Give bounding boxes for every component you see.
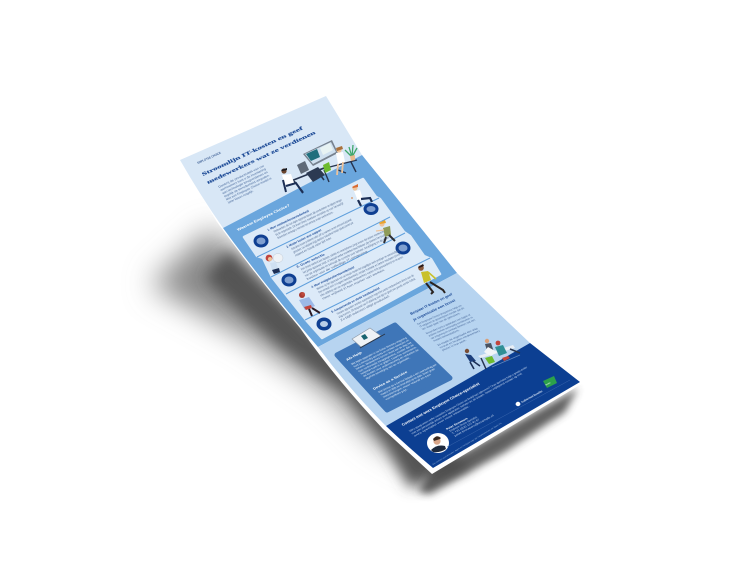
card body one: hun vertrouwde inloggegevens, zonder dat de bbox=[357, 343, 415, 373]
card body one bbox=[350, 336, 423, 380]
reason 3 text: van de organisatie en behoudt de controle over beheer, beveiliging en de totale bbox=[304, 235, 390, 278]
reason 4 text: Dat vertaalt zich in hogere betrokkenheid, minder frustratie en betere resultaten binnen bbox=[317, 252, 402, 294]
reason 5 text: Nieuwe apparaten worden automatisch ingericht zodat medewerkers direct aan de bbox=[336, 273, 415, 316]
logo: green partner: Bechtle bbox=[544, 381, 552, 386]
person right bbox=[336, 147, 342, 153]
card body one: algehele beveiliging van uw organisatie. bbox=[364, 356, 411, 380]
right column heading: Bespaar IT-kosten en geef bbox=[409, 292, 454, 316]
reason 4 text: meer vrijheid in hun manier van werken. bbox=[321, 267, 386, 301]
card body two: investeringen meer vooraf en een bbox=[382, 372, 433, 399]
plant bbox=[345, 145, 357, 157]
card body one: helpdesk hoeft in te grijpen. Daarmee verminderen bbox=[359, 345, 418, 375]
reason 1 text: Bovendien verlaagt u hiermee het verloop onder werknemers. bbox=[276, 210, 334, 240]
panel: why employee choice bbox=[223, 155, 457, 347]
card body two: maand en blijft uw vloot altijd up-to-date. Geen grote bbox=[379, 367, 436, 396]
card body one: Met Apple-apparaten in uw Active Directory-omgeving bbox=[350, 336, 408, 366]
title: Stroomlijn IT-kosten en geef bbox=[201, 125, 305, 177]
right column paragraphs: modern beheerplatform. bbox=[432, 328, 461, 343]
panel: benefits section bbox=[318, 273, 530, 426]
right column paragraphs: vooruit en houden medewerkers bbox=[438, 329, 482, 349]
card heading: device as a service: Device as a Service bbox=[372, 370, 409, 391]
specialist details: Peter Brouwers bbox=[445, 417, 469, 431]
icon: reason 3 bbox=[396, 242, 410, 254]
right column paragraphs: Een Employee Choice-programma helpt om bbox=[416, 304, 463, 326]
footer rule bbox=[447, 380, 570, 447]
intro paragraph: Met een Employee Choice-model is bbox=[225, 176, 273, 201]
heading: why employee choice: Waarom Employee Choice? bbox=[236, 203, 291, 232]
reasons list cards bbox=[244, 179, 440, 338]
paper sheet bbox=[178, 94, 583, 474]
right column paragraphs: Zo maakt de organisatie een stap bbox=[436, 326, 479, 347]
reason 5 text: Zo blijft iedereen altijd productief. bbox=[340, 294, 391, 322]
card body one: beheren. Medewerkers kunnen direct aan de slag met bbox=[355, 341, 413, 371]
logo: green partner bbox=[543, 376, 557, 388]
reason 4 text: 4. Meer eindgebruikerstevredenheid bbox=[310, 265, 355, 289]
intro paragraph: werknemers kunt u de investering bbox=[219, 166, 267, 192]
reason 3 text: het juiste apparaat vindt. U bepaalt welke modellen beschikbaar zijn binnen het budget bbox=[302, 232, 388, 274]
illustration: man with back pain bbox=[299, 292, 320, 316]
contact heading: Contact met onze Employee Choice-specialist bbox=[400, 381, 481, 427]
right column paragraphs bbox=[416, 303, 488, 352]
intro paragraph: tegelijk de tevredenheid vergroten. bbox=[223, 173, 271, 198]
reason 3 text: kosten van de volledige IT-omgeving. bbox=[306, 249, 369, 281]
card body two: Met Device as a Service betaalt u een vast bedrag per bbox=[377, 363, 438, 394]
right column paragraphs: ten koste gaat van de gebruikers. bbox=[420, 311, 462, 331]
icon: reason 4 bbox=[282, 274, 296, 286]
intro paragraph bbox=[217, 163, 275, 205]
icon: apple logo bbox=[516, 402, 520, 406]
contact paragraph: onze specialist voor meer informatie. bbox=[413, 404, 471, 438]
reason 2 text: 2. Minder kosten voor support bbox=[285, 228, 322, 249]
contact paragraph: Wilt u graag weten welke voordelen Employee Choice uw bedrijf kan opleveren? Onze specialist helpt u graag verder bbox=[408, 365, 528, 433]
title: medewerkers wat ze verdienen bbox=[206, 130, 317, 185]
card body one: kunt u eenvoudig accounts en rechten toewijzen en bbox=[352, 338, 411, 368]
reason 1 text bbox=[266, 194, 347, 242]
illustration: woman with speech bubble bbox=[266, 254, 283, 274]
illustration: office desk scene bbox=[281, 140, 357, 193]
icon: reason 5 bbox=[316, 318, 332, 330]
icon: reason 2 bbox=[364, 203, 378, 215]
card heading: help: AD-Help bbox=[345, 350, 363, 362]
reason 2 text: gebruiken. Uw helpdesk krijgt daardoor beduidend minder tickets binnen per bbox=[292, 220, 354, 254]
specialist details: peter.brouwers@example.nl bbox=[453, 414, 495, 437]
reason 4 text: Werken op het apparaat van uw keuze maakt het dagelijkse werk prettiger en eenvoudiger. bbox=[315, 248, 400, 291]
illustration: person running bbox=[351, 184, 372, 206]
right column heading bbox=[409, 292, 457, 322]
right column paragraphs: IT-uitgaven te stroomlijnen zonder dat dit bbox=[418, 306, 465, 328]
panel: intro section bbox=[180, 96, 362, 228]
footer note: Alle rechten voorbehouden. Apple en het Apple-logo zijn handelsmerken van Apple Inc. bbox=[432, 422, 503, 466]
paper drop shadow bbox=[150, 228, 578, 494]
reason 1 text: Medewerkers die hun eigen apparaat kiezen zijn productiever en blijven langer bbox=[272, 198, 343, 234]
person left bbox=[281, 168, 287, 174]
specialist details: T: +31 (0)20 123 45 67 bbox=[451, 418, 481, 435]
reason 2 text: maand en houdt meer tijd over. bbox=[294, 235, 333, 258]
separators bbox=[257, 198, 430, 320]
card body two bbox=[377, 363, 445, 401]
intro paragraph: aan technologie terugverdienen en bbox=[221, 170, 269, 195]
desk bbox=[318, 160, 357, 182]
specialist details: Employee Choice Specialist bbox=[448, 416, 478, 433]
panel: contact section bbox=[386, 343, 580, 468]
card body one: de kosten voor ondersteuning en verbetert de bbox=[362, 348, 420, 378]
specialist photo bbox=[427, 433, 449, 453]
reason 4 text: elke afdeling van uw organisatie. Medewerkers voelen zich gewaardeerd en ervaren bbox=[319, 255, 404, 297]
reason 1 text: bij de organisatie. Dit levert direct meetbare voordelen op voor het bedrijf. bbox=[274, 201, 345, 237]
reason 5 text: 5. Aanpassende en vlotte inzetbaarheid bbox=[330, 286, 381, 314]
icon: laptop bbox=[352, 328, 385, 348]
intro paragraph: Dankzij de productiviteit van uw bbox=[217, 164, 265, 189]
reason 3 text: Een breed aanbod aan laptops, tablets en smartphones zorgt ervoor dat iedere medewerker bbox=[300, 229, 386, 271]
right column heading: je organisatie een boost bbox=[411, 298, 457, 322]
right column paragraphs: plezier in hun werk. bbox=[440, 338, 468, 352]
icon: reason 1 bbox=[254, 234, 268, 248]
monitor bbox=[303, 140, 338, 166]
panel: dark feature card bbox=[337, 325, 450, 410]
eyebrow label: EMPLOYEE CHOICE bbox=[197, 151, 222, 165]
intro paragraph: beter kiezen mogelijk. bbox=[227, 189, 255, 205]
reason 1 text: 1. Meer medewerkerstevredenheid bbox=[266, 209, 310, 232]
reason 2 text: Gebruikers lossen problemen vaker zelf op wanneer ze een vertrouwd apparaat bbox=[290, 217, 353, 251]
specialist details bbox=[445, 407, 495, 438]
partner name: Authorised Reseller bbox=[520, 389, 544, 404]
right column paragraphs: Bovendien kunt u apparaten van Apple of bbox=[424, 313, 472, 335]
right column paragraphs: uw omgeving en centraal beheren met een bbox=[429, 318, 477, 340]
right column paragraphs: andere merken eenvoudig combineren in bbox=[427, 315, 475, 338]
reason 3 text: 3. Grote selectie bbox=[295, 252, 326, 269]
contact paragraph: met een persoonlijk advies over apparaten, beheer en de kosten. Neem vrijblijvend contact op met bbox=[410, 372, 523, 435]
illustration: man in yellow shirt bbox=[418, 264, 445, 294]
card body two: voorspelbare prijs. bbox=[384, 387, 409, 401]
reason 5 text: slag kunnen. Dit bespaart uw IT-afdeling veel tijd en geeft een goede eerste indruk. bbox=[338, 276, 417, 319]
illustration: person walking bbox=[376, 220, 395, 243]
illustration: team around table bbox=[465, 339, 520, 369]
